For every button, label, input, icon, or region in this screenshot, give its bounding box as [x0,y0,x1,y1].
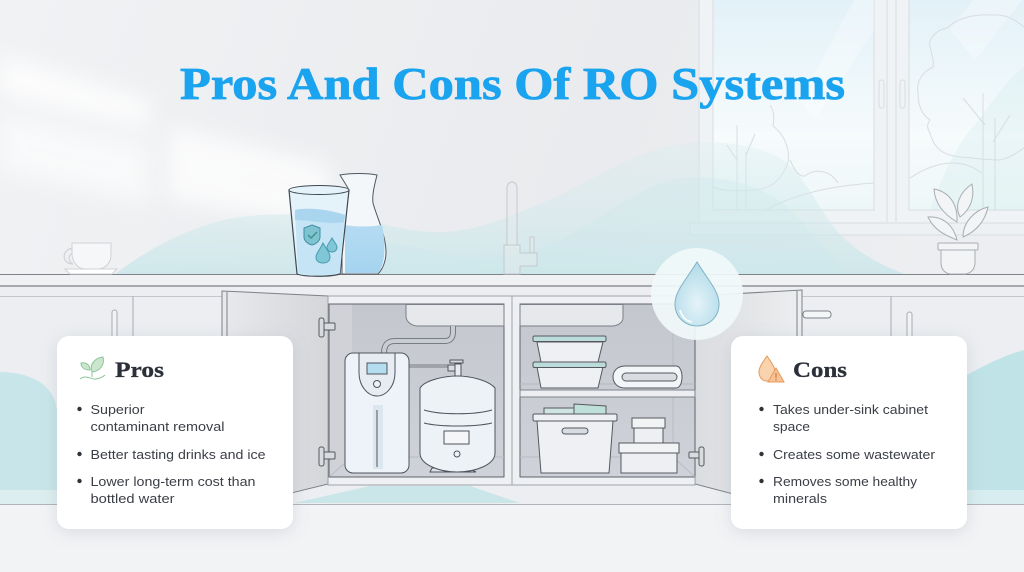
storage tank [420,360,495,472]
pipes [384,326,453,366]
cons list: Takes under-sink cabinet [773,402,928,417]
tree left [713,105,788,191]
pros list [77,402,266,506]
icon: warning drops [759,356,784,382]
pros list: contaminant removal [90,419,225,434]
cabinet handles [133,296,891,336]
cons list: Removes some healthy [773,474,918,489]
pros list: bottled water [90,491,175,506]
cons list: Creates some wastewater [773,447,936,462]
storage containers [533,336,682,473]
cabinet frame [328,296,695,485]
counter [0,274,1024,572]
pros list: Better tasting drinks and ice [90,447,266,462]
pros heading: Pros [115,357,164,382]
title: Pros And Cons Of RO Systems [180,58,845,109]
door hinges [319,318,704,466]
faucet [504,182,537,274]
sink basin [406,304,623,326]
background waves [115,67,1024,274]
panel: cons [731,336,967,529]
panel: pros [57,336,293,529]
cons list [759,402,936,506]
left cabinet door [222,291,328,510]
right cabinet door [695,290,831,512]
cons list: minerals [773,491,828,506]
shelf [520,384,695,397]
glass of water [289,186,349,276]
floor reflection [294,486,520,503]
folded towel [613,366,682,388]
bin [544,408,575,414]
water carafe [340,174,386,274]
icon: drops [316,238,337,263]
icon: shield [304,225,320,245]
RO filter unit [345,353,409,473]
potted plant [928,184,988,274]
icon: sprout [80,357,105,379]
teacup [64,243,117,274]
pros list: Lower long-term cost than [90,474,256,489]
tree right [918,15,1024,160]
small boxes [634,426,663,446]
cons heading: Cons [793,357,847,382]
window [690,0,1024,235]
pros list: Superior [90,402,145,417]
water drop badge [651,248,743,340]
cons list: space [773,419,810,434]
